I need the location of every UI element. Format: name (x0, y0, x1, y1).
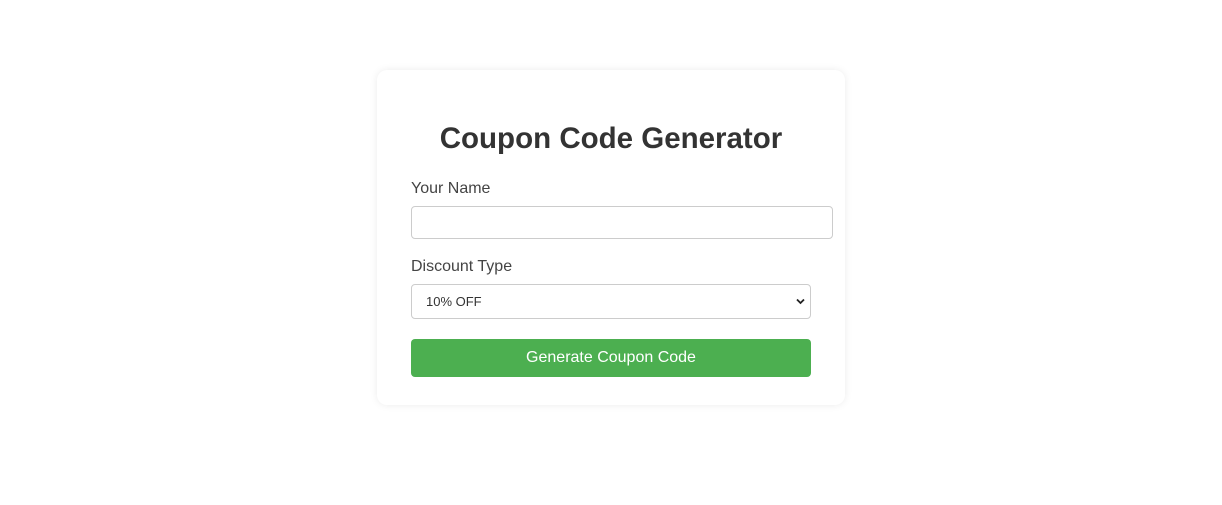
select: discount: 10% OFF (426, 294, 482, 309)
panel: form card (377, 70, 845, 405)
label: discount type: Discount Type (411, 258, 512, 275)
button: generate (411, 339, 811, 377)
select: discount (411, 284, 811, 319)
button: generate: Generate Coupon Code (526, 349, 696, 366)
input: name (411, 206, 833, 239)
title: Coupon Code Generator (440, 122, 782, 155)
label: name: Your Name (411, 180, 490, 197)
